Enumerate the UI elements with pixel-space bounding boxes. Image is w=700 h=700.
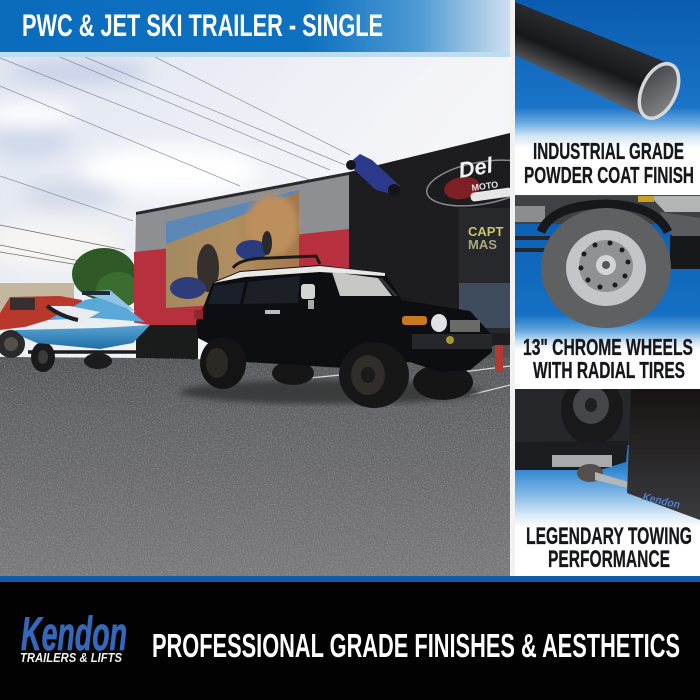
tail light: [194, 310, 203, 319]
white roof: [213, 266, 385, 283]
caption: [524, 338, 692, 378]
dark trailer box behind: [136, 325, 198, 360]
storefront window: [459, 208, 510, 333]
caption: [524, 142, 693, 184]
rear of SUV with spare tire: [515, 389, 631, 470]
icon: black steel tube: [515, 2, 687, 124]
storefront window: MAS: [468, 237, 497, 252]
caption: [526, 527, 692, 568]
clouds: [0, 62, 260, 269]
headlight and signal: [402, 316, 427, 325]
far wheels: [272, 364, 314, 385]
title: PWC & JET SKI TRAILER - SINGLE: [22, 7, 383, 43]
windshield: [332, 272, 392, 296]
building: [134, 133, 510, 346]
mirror: [301, 284, 315, 299]
main photo: jet ski trailer towed by SUV: [0, 57, 541, 576]
jet ski on trailer: [15, 290, 195, 372]
motorcycle on wall: [346, 154, 400, 196]
logo: Kendon Trailers & Lifts: TRAILERS & LIFTS: [20, 651, 123, 665]
panel: towing performance: [515, 389, 700, 568]
white gutter between photo and side panels: [510, 0, 515, 576]
power lines: [0, 57, 350, 266]
distant building and tree: [0, 248, 140, 313]
asphalt ground: [0, 345, 510, 576]
mud flap with Kendon logo: [627, 389, 700, 520]
bumper: [412, 334, 492, 349]
panel: chrome wheels: [515, 195, 700, 389]
trailer frame: [28, 352, 195, 358]
roof rack: [233, 256, 320, 268]
logo: Kendon Trailers & Lifts: [20, 607, 127, 665]
dealership sign: [426, 156, 510, 207]
logo: Kendon Trailers & Lifts: Kendon: [21, 607, 127, 660]
black Toyota FJ SUV: [194, 256, 492, 408]
mural: [166, 190, 299, 308]
storefront window: CAPT: [468, 224, 503, 239]
icon: tire and chrome wheel: [541, 208, 671, 328]
red pickup behind jet ski: [0, 296, 82, 358]
wheels: [200, 343, 246, 389]
footer band: [0, 576, 700, 700]
panel: powder coat finish: [515, 0, 700, 195]
hitch: [577, 464, 628, 488]
dealership sign: MOTO: [471, 179, 499, 193]
windows: [208, 282, 245, 304]
dealership sign: Del: [457, 152, 495, 183]
trailer frame: [515, 196, 700, 269]
body: [196, 265, 492, 372]
door handle: [265, 310, 280, 314]
header band: [0, 0, 510, 57]
mud flap with Kendon logo: Kendon: [641, 491, 681, 512]
